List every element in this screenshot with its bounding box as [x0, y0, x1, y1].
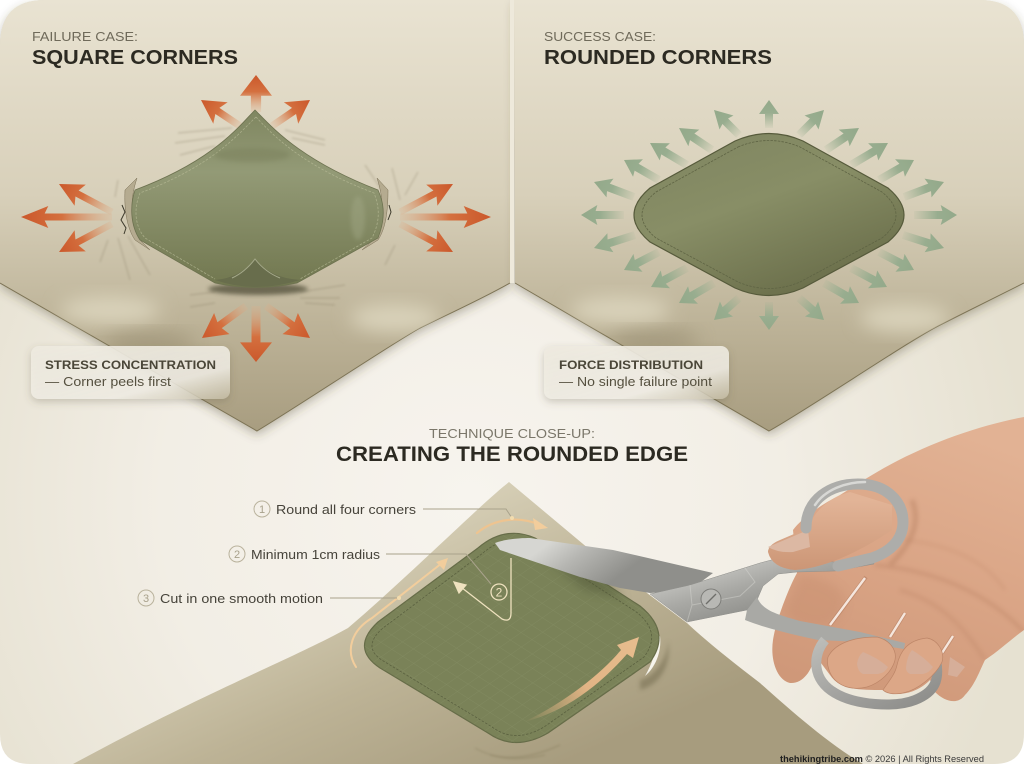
rounded patch	[634, 134, 904, 296]
panel: failure case	[0, 0, 510, 431]
peeling patch: square corners	[121, 110, 391, 295]
sheet highlights	[60, 296, 440, 352]
label 1: Round all four corners	[276, 502, 417, 517]
panel sheet: success	[514, 0, 1024, 431]
finger gaps	[830, 577, 953, 653]
lower handle	[745, 597, 905, 649]
heading: technique close-up: TECHNIQUE CLOSE-UP:	[429, 426, 595, 441]
radius diagram	[454, 558, 511, 620]
callout: force distribution: — No single failure point	[559, 374, 712, 389]
thumbnail	[768, 530, 810, 552]
sheet edge	[0, 283, 510, 431]
footer credit: thehikingtribe.com © 2026 | All Rights Reserved	[780, 754, 984, 764]
heading: success case: ROUNDED CORNERS	[544, 47, 772, 69]
fingernails	[857, 650, 965, 677]
sheet edge	[515, 283, 1024, 431]
panel: technique close-up sheet	[73, 482, 863, 764]
callout labels	[138, 501, 514, 606]
heading: failure case: SQUARE CORNERS	[32, 47, 238, 69]
callout: stress concentration	[31, 346, 230, 399]
panel: success case	[514, 0, 1024, 431]
hand silhouette	[772, 417, 1024, 701]
arrows: even force distribution	[581, 100, 957, 330]
callout: stress concentration: STRESS CONCENTRATION	[45, 358, 216, 372]
panel sheet: failure	[0, 0, 510, 431]
sheet highlights	[570, 296, 950, 350]
scissor facet	[687, 568, 755, 622]
label 2	[229, 546, 491, 584]
radius diagram: 2	[496, 586, 503, 600]
callout: force distribution: FORCE DISTRIBUTION	[559, 358, 703, 372]
callout: force distribution	[544, 346, 729, 399]
pivot screw	[701, 589, 721, 609]
heading: success case: SUCCESS CASE:	[544, 29, 656, 44]
callout: stress concentration: — Corner peels first	[45, 374, 171, 389]
scissor body	[650, 555, 874, 622]
label 1: 1	[259, 504, 265, 516]
label 3: Cut in one smooth motion	[160, 591, 323, 606]
stress wrinkles	[100, 128, 418, 307]
label 3: 3	[143, 593, 149, 605]
hand shading	[798, 500, 1022, 630]
ripstop patch being cut	[364, 533, 669, 758]
thumb	[768, 492, 892, 570]
heading: failure case: FAILURE CASE:	[32, 29, 138, 44]
upper handle ring	[806, 482, 903, 566]
arrows: stress directions	[21, 75, 491, 362]
lower finger ring	[816, 640, 937, 704]
heading: success case	[544, 29, 772, 69]
hand and scissors	[495, 417, 1024, 704]
label 1	[254, 501, 514, 520]
upper blade	[495, 538, 713, 593]
label 3	[138, 590, 401, 606]
label 2: 2	[234, 549, 240, 561]
heading: technique close-up	[336, 426, 688, 466]
heading: failure case	[32, 29, 238, 69]
label 2: Minimum 1cm radius	[251, 547, 381, 562]
arrows: cutting path guides	[351, 518, 639, 722]
fingertips	[827, 637, 943, 694]
heading: technique close-up: CREATING THE ROUNDED EDGE	[336, 443, 688, 466]
